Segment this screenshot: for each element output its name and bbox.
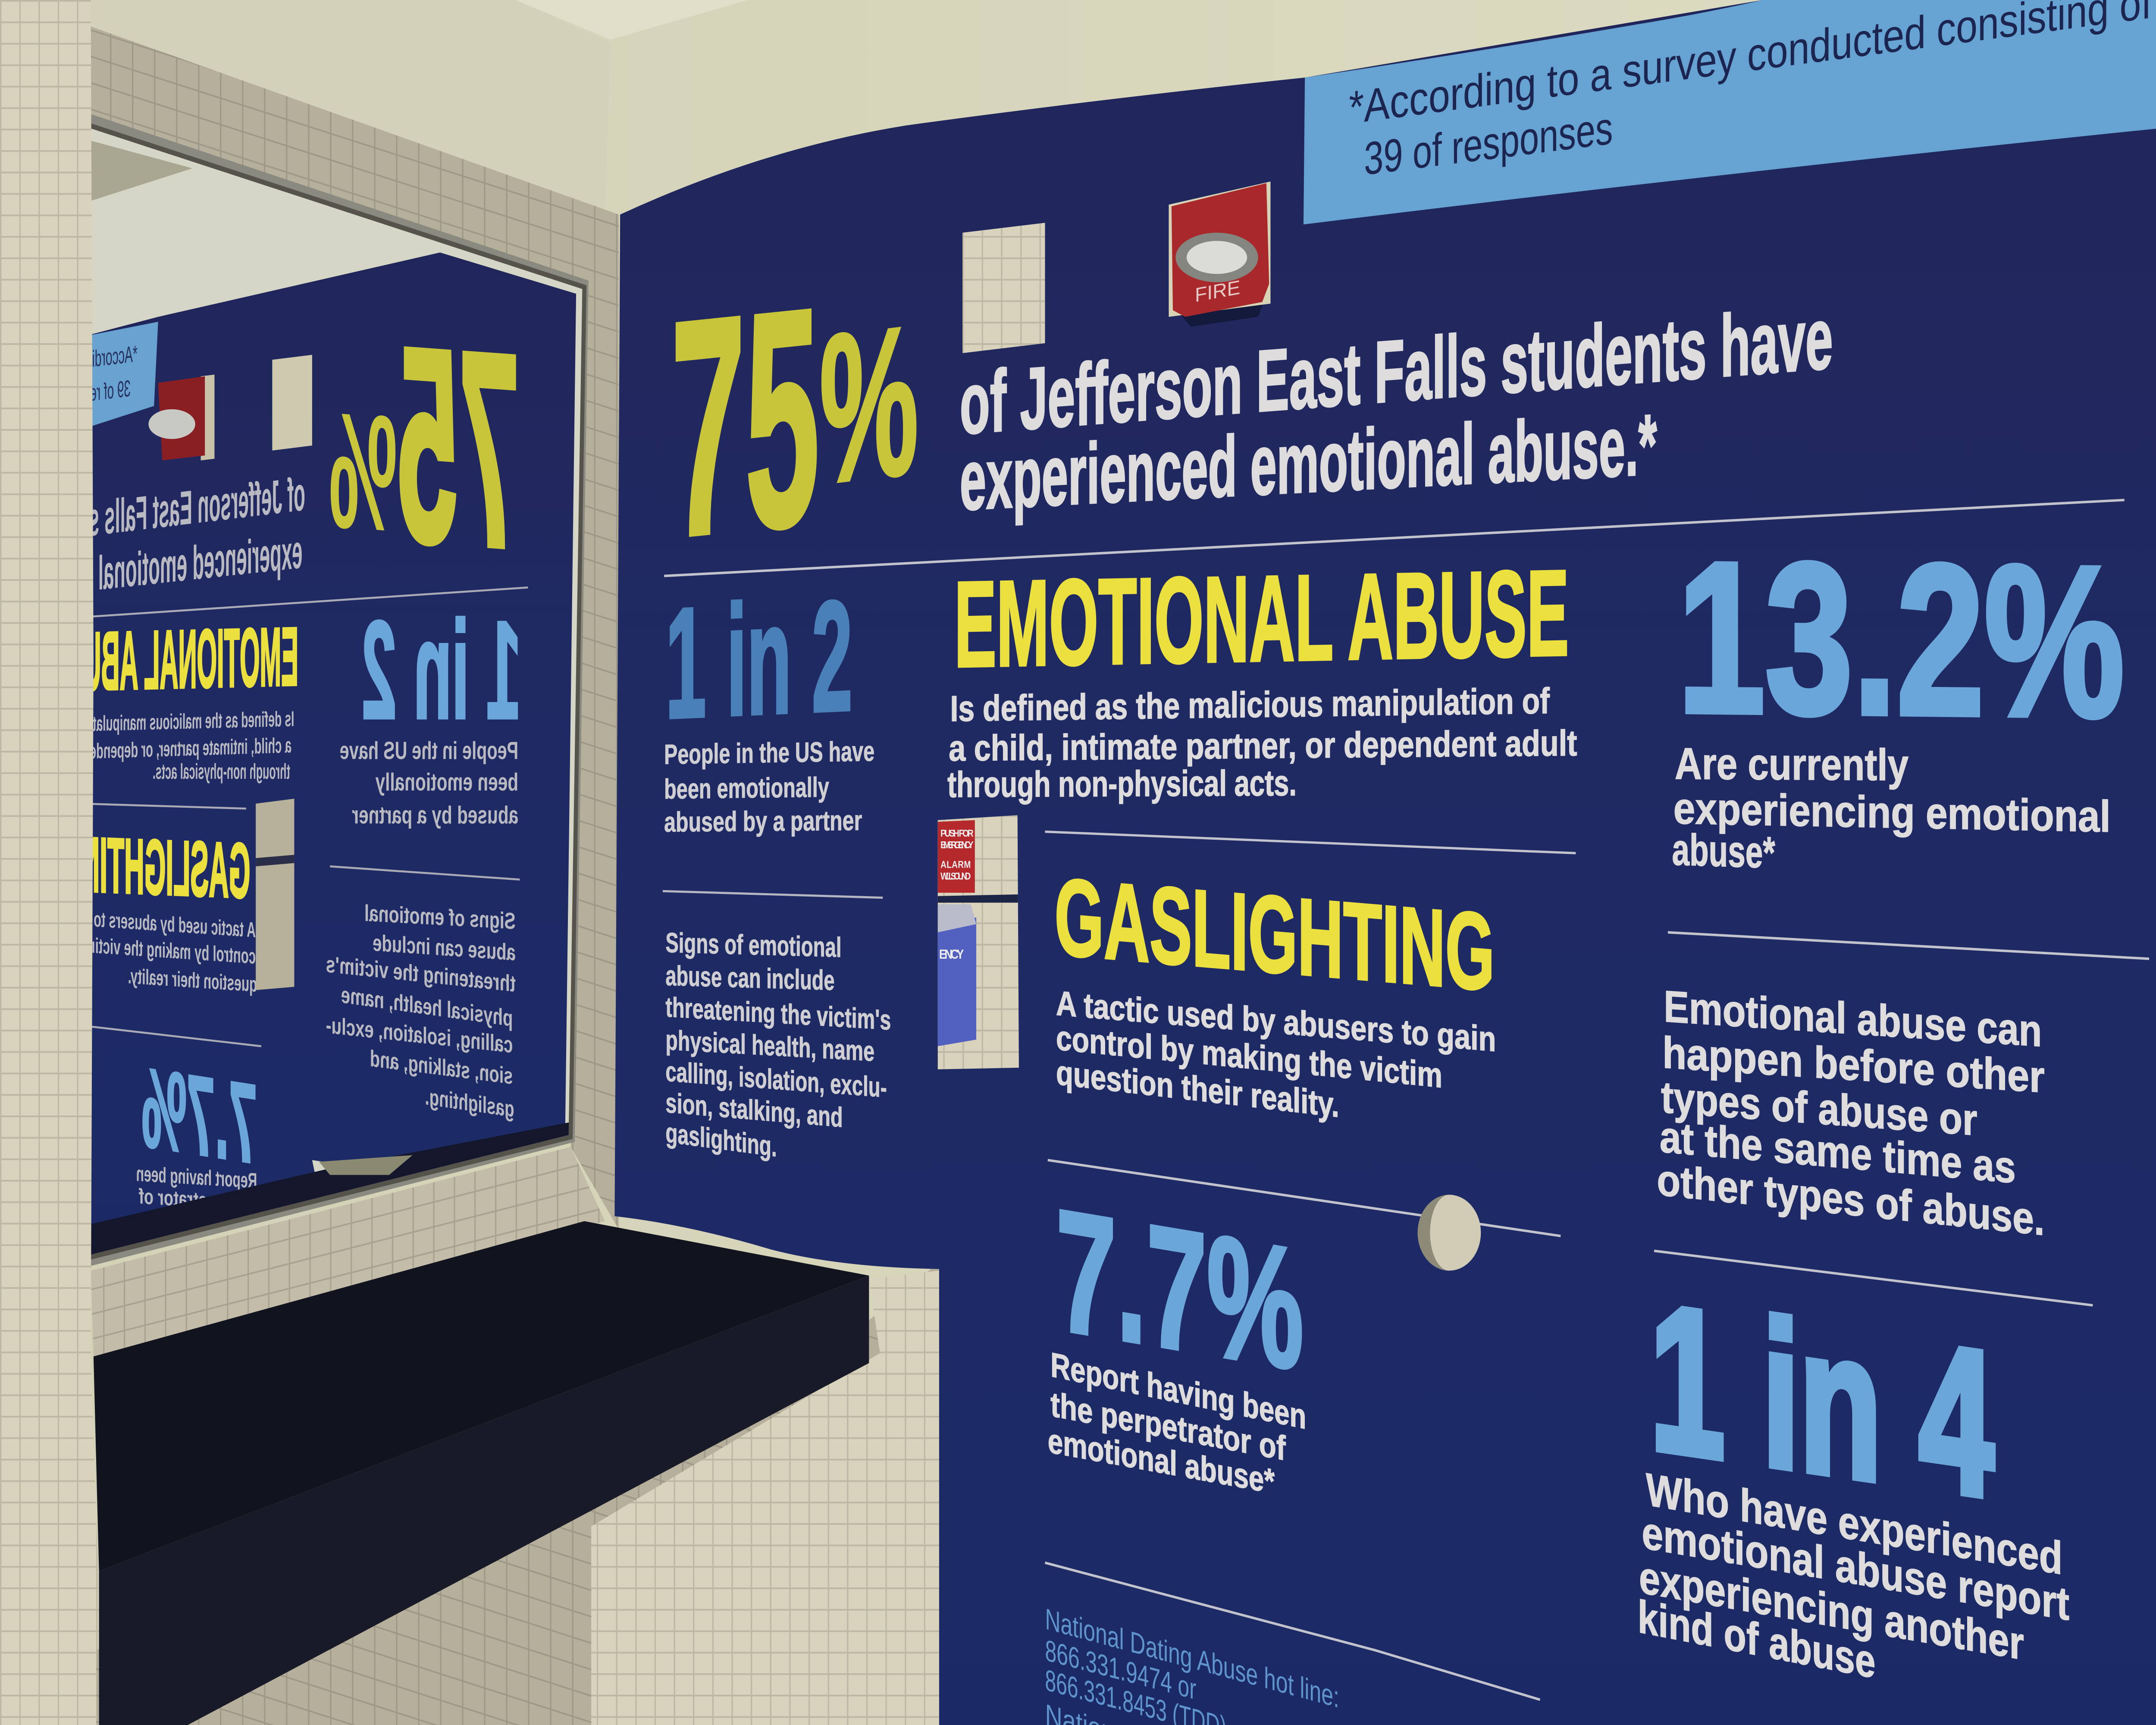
reflected counter edge — [91, 1122, 569, 1255]
reflected poster: A tactic used by abusers to g — [82, 906, 256, 942]
headline stat 75%: % — [820, 281, 918, 528]
footnote banner — [1304, 0, 2156, 224]
stat: 13.2%: Are currently — [1675, 739, 1908, 790]
stat: 13.2%: abuse* — [1672, 825, 1775, 878]
reflected poster: *Accordin — [85, 341, 138, 373]
definition: emotional abuse: Is defined as the malicious manipulation of — [950, 681, 1550, 729]
ceiling — [516, 0, 748, 40]
counter wall below: tiles — [96, 1254, 949, 1725]
cutout with emergency sign and bottle: ENCY — [939, 947, 964, 962]
text: signs of emotional abuse: threatening the victim's — [665, 991, 891, 1036]
circular hole — [1418, 1195, 1481, 1270]
hotline info: 866.331.9474 or — [1045, 1633, 1196, 1706]
reflected poster: 7.7% — [141, 1044, 257, 1188]
text: signs of emotional abuse: sion, stalking, and — [665, 1087, 843, 1133]
reflected ceiling — [89, 140, 192, 201]
reflected poster: question their reality. — [128, 964, 257, 997]
reflected poster: % — [329, 377, 398, 567]
text: signs of emotional abuse: abuse can include — [665, 960, 835, 996]
headline text — [960, 289, 1833, 528]
text: signs of emotional abuse: gaslighting. — [665, 1117, 777, 1163]
stat: 1 in 2: People in the US have — [664, 735, 874, 770]
stat: 1 in 4: emotional abuse report — [1642, 1506, 2069, 1631]
reflected poster: abused by a partner — [352, 801, 518, 829]
stat: 7.7%: 7.7% — [1056, 1174, 1304, 1406]
poster panel — [614, 0, 2156, 1725]
left tile column — [0, 0, 103, 1725]
reflected poster: control by making the victim — [84, 933, 256, 969]
cutout with emergency sign and bottle: WILL SOUND — [940, 871, 971, 882]
reflected poster: sion, stalking, and — [370, 1046, 513, 1089]
stat: 1 in 2: been emotionally — [664, 772, 829, 805]
stat: 13.2% — [1672, 517, 2125, 878]
reflected poster: 39 of res — [84, 376, 131, 407]
reflected poster: 1 in 2 — [362, 592, 521, 747]
reflected poster — [80, 252, 576, 1241]
tile band above mirror — [91, 26, 619, 1229]
stat: 1 in 4: 1 in 4 — [1650, 1261, 1995, 1541]
footnote banner: 39 of responses — [1364, 101, 1613, 185]
tile band below mirror — [91, 1147, 605, 1356]
stat: 13.2%: experiencing emotional — [1673, 784, 2111, 842]
stat: 1 in 4: Who have experienced — [1646, 1464, 2062, 1585]
text: abuse timing: at the same time as — [1660, 1112, 2016, 1193]
stat: 7.7%: Report having been — [1050, 1345, 1306, 1436]
text: abuse timing — [1657, 982, 2045, 1245]
text: abuse timing: types of abuse or — [1661, 1073, 1977, 1145]
definition: gaslighting: question their reality. — [1056, 1053, 1339, 1125]
definition: emotional abuse — [947, 681, 1577, 805]
reflected poster: Signs of emotional — [364, 900, 516, 934]
tile panel right of counter — [591, 1270, 939, 1725]
cutout with emergency sign and bottle — [938, 815, 1019, 1070]
reflected poster: threatening the victim's — [326, 951, 516, 997]
definition: emotional abuse: a child, intimate partner, or dependent adult — [949, 723, 1577, 769]
side wall above tile — [94, 0, 611, 214]
reflected poster: 75 — [398, 288, 520, 607]
stat: 1 in 4: experiencing another — [1639, 1551, 2024, 1670]
cutout with emergency sign and bottle: ALARM — [940, 859, 971, 870]
mirror — [80, 112, 589, 1270]
cutout with emergency sign and bottle: PUSH FOR — [940, 828, 974, 839]
reflected poster: Report having been — [136, 1162, 257, 1193]
stat: 7.7%: emotional abuse* — [1048, 1421, 1275, 1501]
stat: 7.7%: the perpetrator of — [1050, 1385, 1286, 1468]
counter top — [94, 1221, 869, 1725]
cutout with emergency sign and bottle: EMERGENCY — [940, 840, 974, 850]
text: abuse timing: happen before other — [1662, 1028, 2045, 1102]
text: signs of emotional abuse: physical health, name — [665, 1024, 874, 1067]
definition: gaslighting — [1056, 984, 1496, 1125]
definition: gaslighting: control by making the victim — [1056, 1018, 1442, 1095]
stat: 1 in 2 — [664, 568, 874, 838]
headline text: experienced emotional abuse.* — [960, 396, 1657, 528]
reflected poster: abuse can include — [373, 930, 516, 966]
tile cutout in poster — [962, 223, 1045, 353]
text: abuse timing: Emotional abuse can — [1664, 982, 2042, 1056]
stat: 1 in 4: kind of abuse — [1638, 1590, 1875, 1688]
stat: 7.7% — [1048, 1174, 1306, 1501]
stat: 1 in 2: 1 in 2 — [665, 568, 852, 751]
reflected poster: gaslighting. — [425, 1084, 514, 1122]
heading: emotional abuse: EMOTIONAL ABUSE — [954, 545, 1569, 693]
stat: 1 in 2: abused by a partner — [664, 805, 862, 838]
stat: 1 in 4 — [1638, 1261, 2069, 1688]
icon: fire alarm — [1169, 182, 1270, 327]
hotline info: National Dating Abuse hot line: — [1045, 1602, 1339, 1714]
text: signs of emotional abuse — [665, 927, 891, 1163]
reflected poster: physical health, name — [341, 982, 513, 1032]
headline stat 75%: 75 — [671, 244, 820, 602]
heading: gaslighting: GASLIGHTING — [1055, 856, 1495, 1013]
reflected poster: People in the US have — [340, 737, 518, 765]
reflected poster: through non-physical acts. — [153, 760, 290, 784]
reflected poster: been emotionally — [375, 768, 518, 796]
reflected poster: calling, isolation, exclu- — [326, 1012, 513, 1058]
definition: gaslighting: A tactic used by abusers to gain — [1056, 984, 1496, 1059]
text: signs of emotional abuse: calling, isolation, exclu- — [665, 1056, 887, 1104]
icon: fire alarm: FIRE — [1195, 276, 1240, 307]
reflected poster: perpetrator of — [138, 1184, 241, 1214]
text: abuse timing: other types of abuse. — [1657, 1155, 2045, 1245]
definition: emotional abuse: through non-physical acts. — [947, 763, 1297, 805]
text: signs of emotional abuse: Signs of emotional — [665, 927, 842, 963]
